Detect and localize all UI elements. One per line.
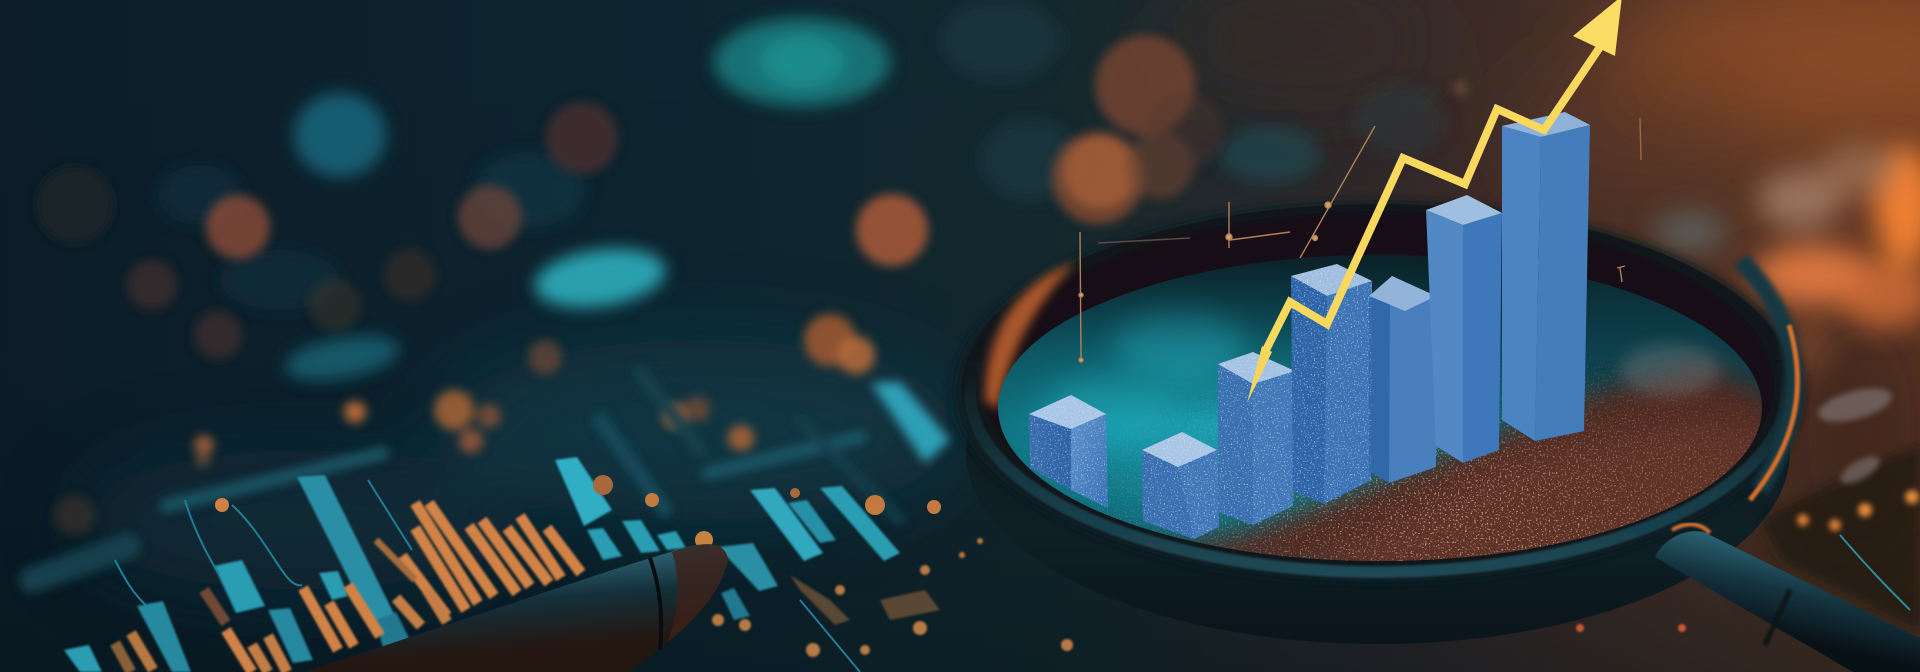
lens copper speckle ground xyxy=(1052,338,1762,561)
desk panel: right side xyxy=(1760,382,1920,630)
blurred salmon foliage: right edge xyxy=(1654,144,1920,373)
chart: teal candlestick bars xyxy=(64,382,950,672)
thin floating guide lines xyxy=(1079,118,1641,362)
bar 5 xyxy=(1369,276,1436,483)
bar 1 xyxy=(1029,395,1108,508)
lens teal glow xyxy=(998,255,1762,561)
bokeh lights: teal xyxy=(158,0,1445,388)
bar dot texture xyxy=(1029,264,1375,540)
chart panel bands: blurred teal xyxy=(32,372,900,580)
bar 3 xyxy=(1218,352,1295,525)
magnifier body xyxy=(954,202,1802,644)
magnifier handle xyxy=(1655,524,1920,672)
magnifier rim xyxy=(962,204,1797,572)
magnifier inner wall with orange crescent xyxy=(984,213,1772,557)
bar 7 xyxy=(1502,112,1590,441)
bar 6 xyxy=(1426,195,1502,463)
bar chart: seven blue 3D bars xyxy=(1029,112,1590,540)
bokeh lights: orange xyxy=(37,35,1467,535)
chart: thin trend lines and markers xyxy=(115,475,941,672)
bar 2 xyxy=(1142,432,1219,539)
rising yellow arrow xyxy=(1247,0,1622,403)
pen xyxy=(305,544,728,672)
bar 4 xyxy=(1291,264,1372,504)
lens contents xyxy=(998,255,1762,561)
chart: scattered orange marks, lower middle xyxy=(712,538,1686,657)
chart: orange bars xyxy=(115,503,581,672)
